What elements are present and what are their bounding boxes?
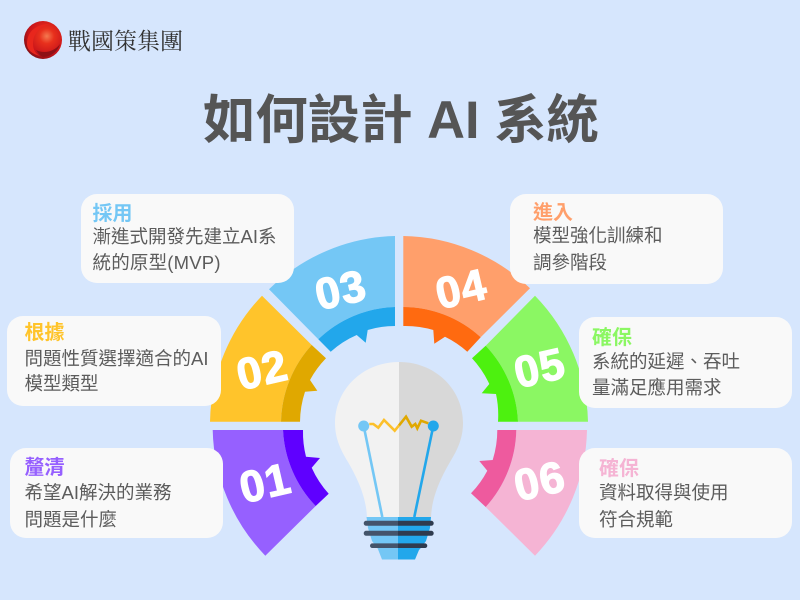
text: 模型強化訓練和 (533, 225, 663, 246)
segment 05: 05 (510, 339, 570, 398)
title: 如何設計 AI 系統 (203, 92, 599, 150)
segment 03 (269, 236, 395, 352)
icon: company logo sphere (24, 21, 62, 59)
panel: step 02 (7, 316, 221, 406)
text: 資料取得與使用 (599, 482, 729, 503)
segment 05 (472, 296, 588, 422)
panel: step 05 (579, 317, 792, 408)
panel: step 03 (81, 194, 294, 283)
text: 符合規範 (599, 509, 673, 530)
segment 02 (210, 296, 326, 422)
segment 02: 02 (232, 341, 293, 400)
text: 問題性質選擇適合的AI (24, 348, 208, 369)
text: 量滿足應用需求 (592, 377, 722, 398)
heading: 釐清 (24, 457, 64, 479)
text: 模型類型 (24, 373, 99, 394)
heading: 確保 (592, 327, 632, 349)
segment 04: 04 (431, 260, 492, 319)
icon: light bulb (335, 362, 463, 560)
segment 01: 01 (235, 454, 296, 513)
text: 統的原型(MVP) (92, 252, 221, 273)
text: 希望AI解決的業務 (24, 482, 171, 503)
heading: 確保 (599, 458, 639, 480)
segment 06: 06 (510, 452, 570, 511)
text: 系統的延遲、吞吐 (592, 351, 740, 372)
heading: 進入 (533, 202, 573, 224)
segment 06 (471, 430, 587, 556)
heading: 根據 (24, 322, 64, 344)
segment 03: 03 (311, 261, 371, 320)
text: 調參階段 (533, 252, 607, 273)
brand name: 戰國策集團 (68, 23, 183, 56)
text: 問題是什麼 (24, 509, 117, 530)
text: 漸進式開發先建立AI系 (92, 226, 276, 247)
segment 01 (213, 430, 329, 556)
heading: 採用 (92, 203, 132, 225)
panel: step 04 (510, 194, 723, 284)
panel: step 01 (10, 448, 223, 538)
segment 04 (403, 236, 530, 352)
panel: step 06 (579, 448, 792, 538)
